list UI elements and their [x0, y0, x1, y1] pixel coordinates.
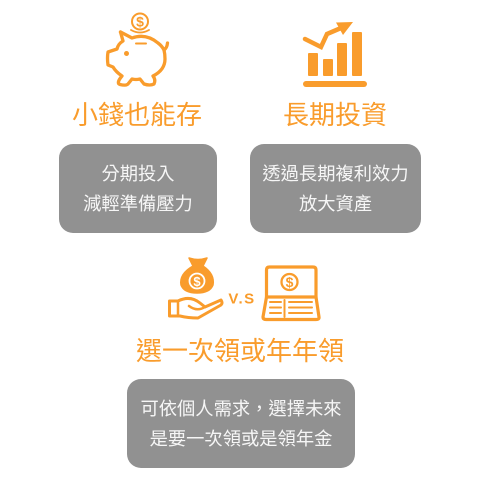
text panel: compound interest: 放大資產: [299, 193, 372, 214]
heading: small savings: 小錢也能存: [72, 100, 202, 130]
icon: laptop with dollar sign: $: [286, 274, 294, 290]
heading: lump sum or annuity: 選一次領或年年領: [136, 336, 344, 366]
text panel: choose by need: 是要一次領或是領年金: [150, 428, 332, 449]
icon: piggy bank with coin: [108, 14, 168, 85]
icon: rising bar chart with arrow: [303, 22, 367, 87]
text panel: installment investing: [59, 144, 217, 233]
text panel: compound interest: [250, 144, 421, 233]
icon: piggy bank with coin: $: [136, 14, 144, 30]
icon: money bag over open hand: $: [193, 274, 201, 289]
text panel: installment investing: 減輕準備壓力: [83, 193, 193, 214]
heading: long-term investing: 長期投資: [283, 100, 387, 130]
icon: laptop with dollar sign: [263, 267, 319, 320]
text panel: choose by need: 可依個人需求，選擇未來: [140, 398, 342, 419]
text panel: installment investing: 分期投入: [101, 163, 175, 184]
text panel: compound interest: 透過長期複利效力: [262, 163, 409, 184]
label: v.s: V.S: [228, 290, 256, 308]
icon: money bag over open hand: [170, 258, 222, 318]
text panel: choose by need: [127, 379, 355, 468]
